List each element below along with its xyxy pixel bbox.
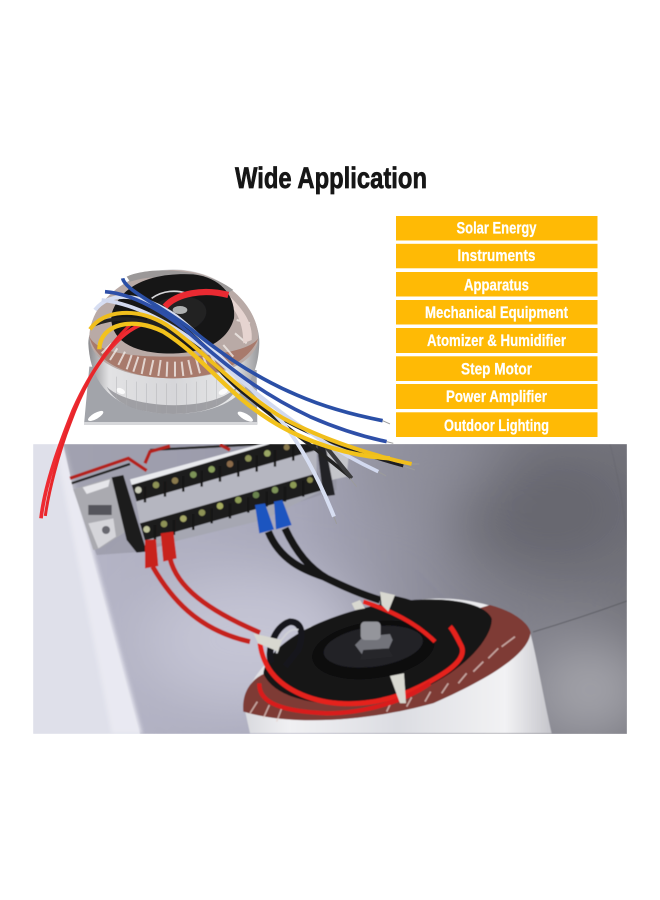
- shadow under block: [63, 444, 337, 555]
- black top insulation: [111, 274, 234, 353]
- label: Outdoor Lighting: Outdoor Lighting: [444, 416, 549, 435]
- black wire: [93, 319, 350, 477]
- brass screws: [135, 444, 313, 533]
- cabinet left wall: [33, 444, 140, 734]
- title: Wide Application: [235, 162, 427, 195]
- label: Power Amplifier: [396, 384, 598, 409]
- label: Mechanical Equipment: [396, 300, 598, 324]
- centre bolt: [354, 634, 394, 654]
- mounting plate: [84, 367, 257, 425]
- toroidal transformer body: [243, 500, 552, 733]
- label: Atomizer & Humidifier: Atomizer & Humidifier: [427, 331, 566, 350]
- label: Apparatus: Apparatus: [464, 276, 529, 294]
- label: Instruments: [396, 244, 598, 268]
- white wires: [95, 297, 334, 517]
- yellow wires: [90, 313, 412, 464]
- infographic: [33, 166, 627, 734]
- label: Instruments: Instruments: [458, 246, 536, 265]
- lower rail body: [136, 450, 317, 523]
- transformer product image with lead wires: [41, 269, 419, 524]
- label: Apparatus: [396, 272, 598, 296]
- panel seam lines: [533, 600, 627, 632]
- black far end post: [317, 443, 335, 497]
- label: Step Motor: [396, 356, 598, 381]
- copper winding: [243, 605, 531, 720]
- red wires: [41, 278, 419, 524]
- terminal block: [63, 443, 350, 642]
- black top disc: [263, 599, 492, 704]
- rear wires: [72, 444, 263, 483]
- body side: [243, 598, 552, 733]
- red crimp connectors and wires: [153, 558, 260, 642]
- cable ties: [253, 592, 406, 703]
- label: Solar Energy: Solar Energy: [456, 218, 537, 238]
- copper winding top: [89, 270, 258, 378]
- label: Solar Energy: [396, 216, 598, 240]
- black leads: [268, 528, 380, 600]
- application list: [396, 216, 598, 437]
- label: Outdoor Lighting: [396, 412, 598, 437]
- vertical tape ribbing: [117, 375, 217, 413]
- metal clip at far end: [326, 444, 350, 480]
- blue wires: [123, 278, 383, 421]
- upper rail: [130, 443, 270, 485]
- bare wire tips: [334, 421, 419, 524]
- metal bracket: [73, 477, 128, 550]
- terminal dividers: [145, 445, 303, 540]
- label: Power Amplifier: Power Amplifier: [446, 387, 547, 406]
- label: Step Motor: Step Motor: [461, 360, 532, 378]
- transformer side: [88, 269, 259, 414]
- red winding leads: [260, 627, 462, 704]
- black end post: [112, 475, 147, 553]
- top black loop: [270, 622, 301, 667]
- label: Mechanical Equipment: Mechanical Equipment: [425, 303, 568, 322]
- blue crimp connectors: [255, 500, 292, 533]
- label: Atomizer & Humidifier: [396, 328, 598, 353]
- photo: toroidal transformer installed in cabinet: [33, 443, 650, 740]
